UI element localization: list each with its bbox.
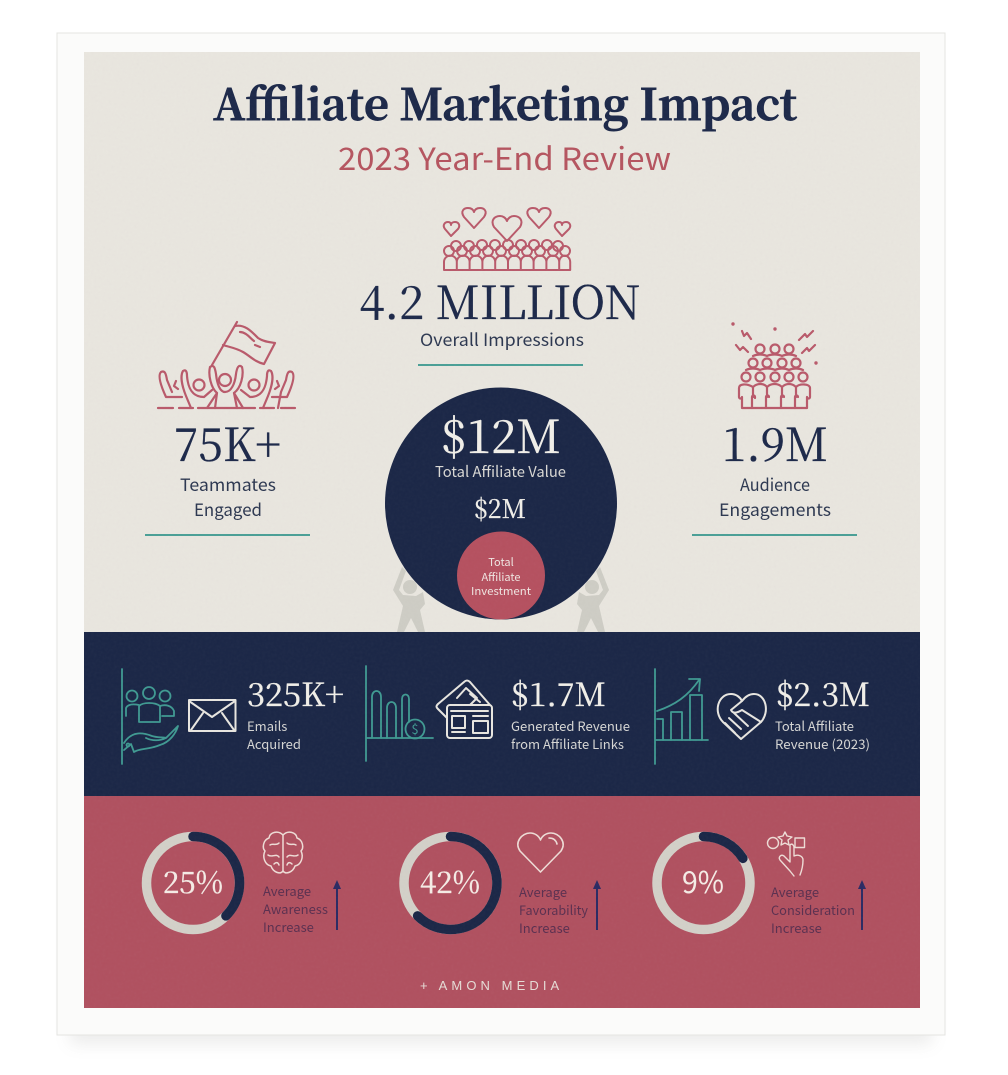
stat: teammates engaged: 75K+: [174, 409, 281, 475]
donut chart: 9% consideration: [657, 836, 750, 930]
icon: bar chart with coin: [366, 666, 433, 761]
label: favorability increase: Favorability: [519, 900, 588, 919]
stat: total affiliate revenue: Revenue (2023): [775, 734, 870, 753]
panel: red awareness band: [84, 796, 920, 1008]
navy value circle: Total Affiliate Value: [435, 461, 566, 482]
label: awareness increase: Awareness: [263, 899, 328, 918]
arrow: consideration up: [858, 880, 866, 930]
label: consideration increase: Average: [771, 882, 819, 901]
label: awareness increase: Average: [263, 881, 311, 900]
red investment circle: [457, 532, 545, 620]
navy value circle: Total: [488, 554, 514, 570]
icon: crowd sparkle dots: [731, 322, 818, 365]
icon: flag and raised hands: [158, 322, 295, 408]
stat: overall impressions: 4.2 MILLION: [360, 267, 640, 333]
arrow: favorability up: [593, 880, 601, 930]
subtitle: 2023 Year-End Review: [338, 134, 671, 179]
total affiliate value: $12M: [441, 401, 561, 467]
label: consideration increase: [771, 882, 855, 937]
icon: left figure holding the circle: [393, 567, 425, 632]
stat: generated revenue: [511, 670, 630, 753]
paper grain: [84, 52, 920, 1008]
title: Affiliate Marketing Impact: [213, 72, 797, 133]
stat: audience engagements: [719, 409, 831, 521]
stat: generated revenue: Generated Revenue: [511, 716, 630, 735]
icon: dollar on coin: $: [411, 719, 419, 738]
stat: total affiliate revenue: [775, 670, 870, 753]
stat: teammates engaged: Teammates: [180, 471, 276, 496]
icon: hand holding people: [122, 669, 178, 764]
label: favorability increase: Increase: [519, 918, 570, 937]
stat: total affiliate revenue: Total Affiliate: [775, 716, 854, 735]
icon: excited crowd: [736, 331, 815, 408]
label: consideration increase: Increase: [771, 918, 822, 937]
stat: overall impressions: Overall Impressions: [420, 326, 584, 351]
stat: emails acquired: Acquired: [247, 734, 301, 753]
stat: total affiliate revenue: $2.3M: [776, 670, 870, 716]
stat: generated revenue: $1.7M: [511, 670, 606, 716]
icon: heart: [518, 833, 563, 872]
stat: emails acquired: 325K+: [247, 670, 344, 716]
stat: teammates engaged: Engaged: [194, 496, 262, 521]
navy value circle: Affiliate: [481, 569, 521, 585]
label: consideration increase: Consideration: [771, 900, 855, 919]
label: awareness increase: [263, 881, 328, 936]
navy value circle: $2M: [474, 489, 526, 526]
stat: audience engagements: Engagements: [719, 496, 831, 521]
panel: cream header background: [84, 52, 920, 633]
panel: navy metrics band: [84, 632, 920, 796]
donut chart: 9% consideration: 9%: [682, 858, 724, 902]
stat: audience engagements: Audience: [740, 471, 810, 496]
icon: brain: [263, 832, 303, 873]
donut chart: 42% favorability: [404, 836, 497, 930]
arrow: awareness up: [333, 880, 341, 930]
icon: handshake heart: [718, 694, 766, 739]
footer brand: + AMON MEDIA: [420, 978, 562, 993]
donut chart: 25% awareness: [146, 836, 240, 930]
icon: envelope: [189, 700, 236, 731]
icon: finger selecting shapes: [768, 832, 804, 876]
navy value circle: [385, 388, 617, 620]
donut chart: 42% favorability: 42%: [420, 858, 480, 902]
stat: audience engagements: 1.9M: [722, 409, 828, 475]
stat: teammates engaged: [174, 409, 281, 521]
icon: right figure holding the circle: [577, 567, 609, 632]
stat: generated revenue: from Affiliate Links: [511, 734, 624, 753]
label: favorability increase: Average: [519, 882, 567, 901]
label: awareness increase: Increase: [263, 917, 314, 936]
icon: growth chart: [655, 669, 708, 764]
label: favorability increase: [519, 882, 588, 937]
card shadow: [70, 48, 932, 1044]
navy value circle: Investment: [471, 583, 531, 599]
stat: emails acquired: Emails: [247, 716, 287, 735]
donut chart: 25% awareness: 25%: [163, 858, 223, 902]
icon: hearts above crowd: [444, 208, 570, 270]
icon: newspaper: [436, 680, 492, 738]
stat: emails acquired: [247, 670, 344, 753]
